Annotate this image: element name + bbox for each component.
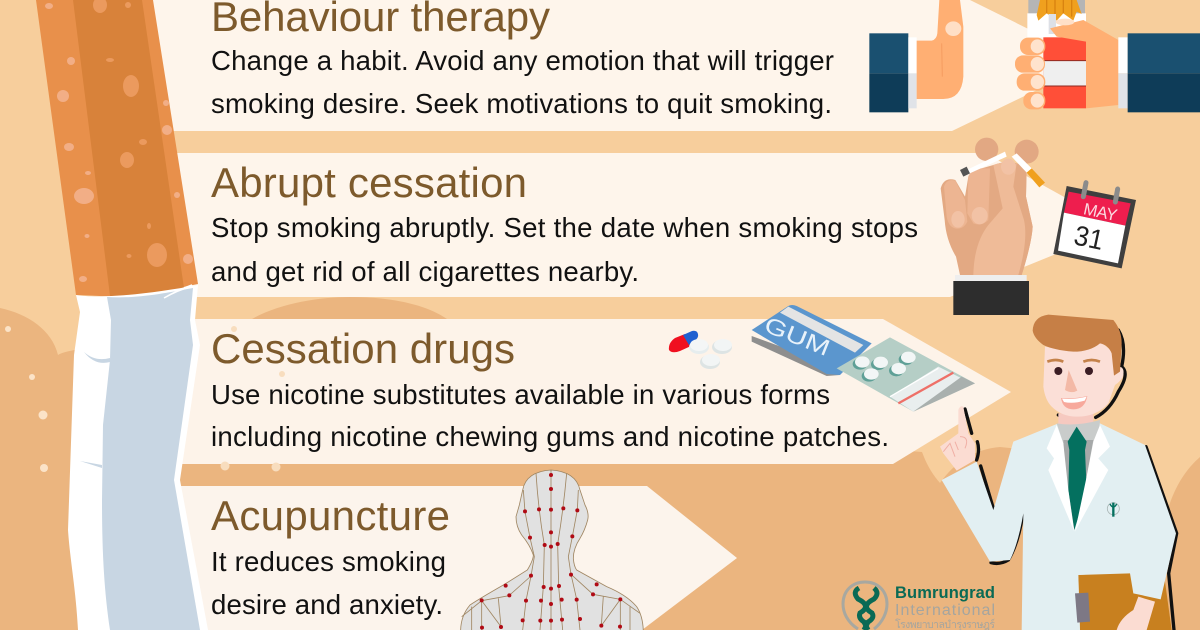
text: acupuncture: It reduces smoking <box>211 546 446 577</box>
hair <box>1033 315 1122 376</box>
tie <box>1068 427 1087 530</box>
coat emblem <box>1107 503 1119 515</box>
icon: hand holding cigarette pack <box>1015 0 1200 112</box>
heading: abrupt cessation: Abrupt cessation <box>211 159 527 206</box>
nose <box>1065 370 1077 392</box>
icon: gum pack <box>752 305 872 376</box>
cigarette paper <box>68 285 208 630</box>
icon: calendar: 31 <box>1071 220 1107 256</box>
icon: nicotine patch <box>837 337 975 412</box>
clipboard clip <box>1075 593 1090 623</box>
cloud dots <box>5 326 48 472</box>
heading: acupuncture: Acupuncture <box>211 492 450 539</box>
icon: capsule and pills <box>669 331 732 369</box>
text: cessation drugs: including nicotine chewing gums and nicotine patches. <box>211 421 889 452</box>
heading: cessation drugs: Cessation drugs <box>211 325 515 372</box>
doctor shadow <box>965 330 1177 630</box>
lapels <box>1047 425 1074 532</box>
cigarette filter <box>36 0 198 296</box>
text: behaviour therapy: smoking desire. Seek motivations to quit smoking. <box>211 88 832 119</box>
logo: Bumrungrad International <box>843 582 995 630</box>
icon: acupuncture body <box>461 470 643 630</box>
cigarette <box>36 0 208 630</box>
icon: calendar <box>1053 183 1136 268</box>
panel: behaviour therapy <box>148 0 1095 131</box>
coat <box>942 423 1176 630</box>
mouth <box>1061 396 1087 409</box>
face <box>1043 342 1124 417</box>
neck and collar <box>1058 413 1093 425</box>
panel dots <box>220 326 285 472</box>
logo: Bumrungrad International: Bumrungrad <box>895 584 995 602</box>
background clouds <box>0 297 1200 630</box>
panel: cessation drugs <box>176 319 1011 464</box>
doctor <box>940 315 1177 630</box>
logo mark <box>843 582 887 630</box>
icon: stop hand <box>869 0 963 112</box>
text: cessation drugs: Use nicotine substitutes available in various forms <box>211 379 830 410</box>
panel: abrupt cessation <box>170 153 1120 297</box>
panel: acupuncture <box>175 486 737 630</box>
icon: calendar: MAY <box>1082 199 1119 225</box>
text: abrupt cessation: and get rid of all cigarettes nearby. <box>211 256 639 287</box>
eyes and brows <box>1054 367 1062 375</box>
raised hand <box>940 406 975 471</box>
icon: gum pack: GUM <box>761 311 834 361</box>
icon: hand breaking cigarette <box>941 138 1045 315</box>
logo: Bumrungrad International: International <box>895 602 995 619</box>
text: behaviour therapy: Change a habit. Avoid any emotion that will trigger <box>211 45 834 76</box>
lower hand <box>1117 597 1155 630</box>
clipboard <box>1078 569 1172 630</box>
text: abrupt cessation: Stop smoking abruptly. Set the date when smoking stops <box>211 212 918 243</box>
text: acupuncture: desire and anxiety. <box>211 589 443 620</box>
